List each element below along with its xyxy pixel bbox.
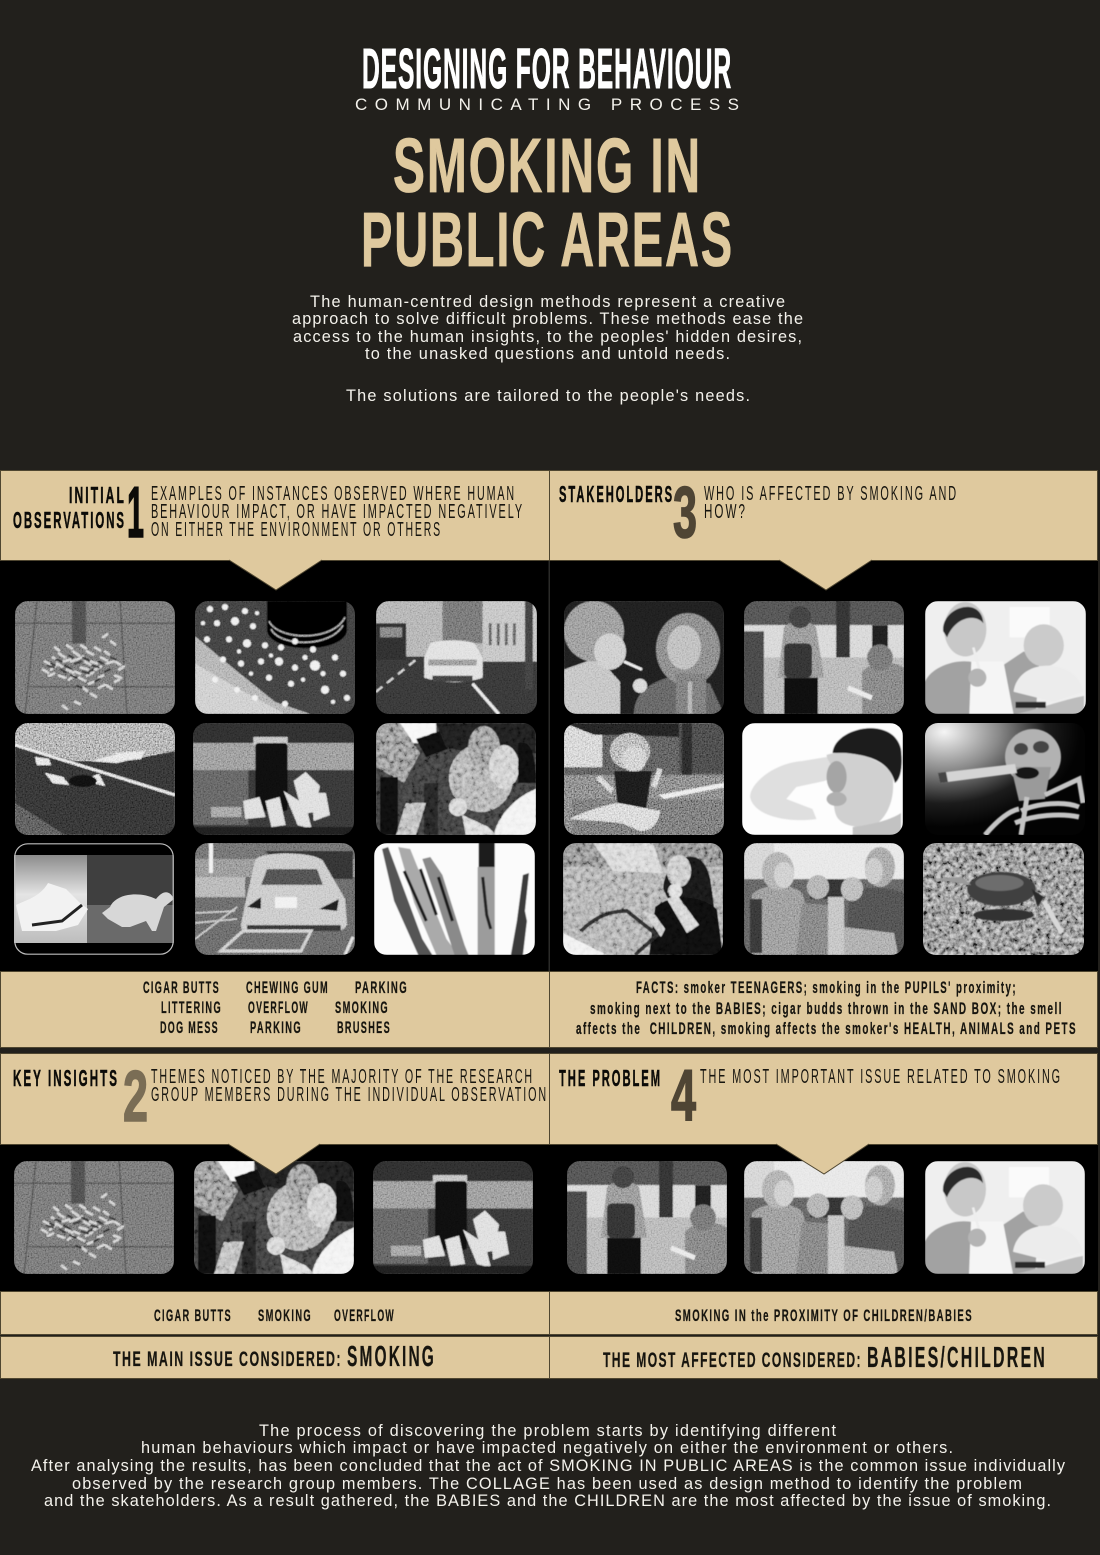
- intro paragraph: The human-centred design methods represent a creative: [310, 293, 785, 311]
- topic heading: PUBLIC AREAS: [361, 197, 734, 283]
- topic heading: SMOKING IN: [393, 123, 702, 209]
- intro paragraph: access to the human insights, to the peoples' hidden desires,: [293, 328, 802, 346]
- photo: mother and baby: [925, 601, 1086, 714]
- number 4: 4: [671, 1056, 696, 1136]
- photo: mother and baby: [925, 1161, 1085, 1274]
- panel: stakeholders header: [550, 470, 1098, 560]
- panel: main issue conclusion: THE MAIN ISSUE CONSIDERED:: [113, 1348, 342, 1371]
- arrow: observations pointer: [229, 560, 322, 590]
- closing paragraph: human behaviours which impact or have impacted negatively on either the environment or others.: [141, 1439, 953, 1457]
- panel: the problem header: THE PROBLEM: [559, 1065, 662, 1091]
- panel: the problem header: [550, 1054, 1098, 1144]
- panel: observations caption: CHEWING GUM: [246, 978, 329, 997]
- photo: smoking teenagers: [564, 601, 724, 714]
- photo: parking on street: [376, 601, 537, 714]
- panel: problem caption: [550, 1292, 1098, 1334]
- photo: smoking man: [376, 723, 536, 835]
- heading: KEY INSIGHTS: [13, 1065, 119, 1091]
- description: GROUP MEMBERS DURING THE INDIVIDUAL OBSERVATION: [151, 1084, 548, 1106]
- photo: brushes: [374, 843, 535, 955]
- intro paragraph: The solutions are tailored to the people's needs.: [346, 387, 750, 405]
- panel: key insights caption: SMOKING: [258, 1306, 312, 1325]
- description: EXAMPLES OF INSTANCES OBSERVED WHERE HUMAN: [151, 483, 516, 505]
- arrow: key insights pointer: [228, 1144, 320, 1174]
- number 3: 3: [673, 473, 697, 553]
- panel: initial observations header: 1: [127, 473, 144, 553]
- panel: main issue conclusion: SMOKING: [347, 1341, 436, 1373]
- panel: observations caption: LITTERING: [161, 998, 222, 1017]
- panel: key insights caption: [0, 1292, 550, 1334]
- panel: stakeholders header: STAKEHOLDERS: [559, 481, 674, 507]
- photo: family with bottles: [744, 1161, 904, 1274]
- closing paragraph: and the skateholders. As a result gathered, the BABIES and the CHILDREN are the most affected by the issue of smoking.: [44, 1492, 1051, 1510]
- photo: dog mess: [14, 843, 174, 955]
- photo: smoking man: [194, 1161, 354, 1274]
- panel: observations caption: SMOKING: [335, 998, 389, 1017]
- photo grid: observations: [14, 601, 537, 955]
- title block: [355, 37, 739, 283]
- description: [704, 483, 958, 523]
- photo row: key insights: [14, 1161, 533, 1274]
- subtitle: COMMUNICATING PROCESS: [355, 95, 739, 114]
- panel: black photo backgrounds: [0, 561, 1098, 1292]
- photo: child holding nose: [742, 723, 903, 835]
- intro paragraph: [292, 293, 803, 405]
- description: [151, 483, 524, 541]
- photo: overflowing bin: [193, 723, 354, 835]
- closing paragraph: After analysing the results, has been concluded that the act of SMOKING IN PUBLIC AREAS is the common issue individually: [31, 1457, 1066, 1475]
- photo: smoking skeleton: [925, 723, 1085, 835]
- panel: key insights header: [0, 1054, 550, 1144]
- heading: INITIAL: [69, 482, 126, 508]
- panel: main issue conclusion: [0, 1336, 550, 1378]
- closing paragraph: observed by the research group members. The COLLAGE has been used as design method to identify the problem: [72, 1475, 1022, 1493]
- panel: observations caption: PARKING: [355, 978, 408, 997]
- closing paragraph: The process of discovering the problem starts by identifying different: [259, 1422, 836, 1440]
- intro paragraph: to the unasked questions and untold needs.: [365, 345, 730, 363]
- panel: stakeholders caption: [550, 972, 1098, 1048]
- photo: littering: [15, 723, 175, 835]
- panel: key insights caption: CIGAR BUTTS: [154, 1306, 232, 1325]
- arrow: stakeholders pointer: [779, 560, 872, 590]
- heading: [13, 482, 126, 533]
- photo: street pupils: [744, 601, 904, 714]
- panel: observations caption: PARKING: [250, 1018, 302, 1037]
- panel: initial observations header: OBSERVATIONS: [13, 507, 126, 533]
- photo: family with bottles: [744, 843, 904, 955]
- panel: observations caption: OVERFLOW: [248, 998, 309, 1017]
- photo: disabled parking: [195, 843, 355, 955]
- panel: key insights caption: OVERFLOW: [334, 1306, 395, 1325]
- panel: observations caption: DOG MESS: [160, 1018, 219, 1037]
- photo grid: stakeholders: [563, 601, 1086, 955]
- panel: most affected conclusion: [550, 1336, 1098, 1378]
- photo: street pupils: [567, 1161, 727, 1274]
- photo: cigar butts: [14, 1161, 174, 1274]
- panel: observations caption: BRUSHES: [337, 1018, 391, 1037]
- description: THEMES NOTICED BY THE MAJORITY OF THE RESEARCH: [151, 1066, 534, 1088]
- description: ON EITHER THE ENVIRONMENT OR OTHERS: [151, 519, 442, 541]
- panel: observations caption: CIGAR BUTTS: [143, 978, 220, 997]
- description: [151, 1066, 548, 1106]
- description: HOW?: [704, 501, 747, 523]
- panel: observations caption: [0, 972, 550, 1048]
- photo: child in sandbox: [564, 723, 732, 835]
- photo row: the problem: [567, 1161, 1085, 1274]
- photo: mother with pram: [563, 843, 723, 955]
- closing paragraph: [31, 1422, 1066, 1510]
- photo: cigar butts: [15, 601, 175, 714]
- panel: initial observations header: [0, 470, 550, 560]
- intro paragraph: approach to solve difficult problems. These methods ease the: [292, 310, 803, 328]
- topic heading: [361, 123, 734, 283]
- photo: bird with cigarette: [923, 843, 1084, 955]
- arrow: problem pointer: [776, 1144, 869, 1174]
- photo: chewing gum: [195, 601, 355, 714]
- number 2: 2: [123, 1057, 148, 1137]
- panel: most affected conclusion: THE MOST AFFECTED CONSIDERED:: [603, 1349, 862, 1372]
- description: BEHAVIOUR IMPACT, OR HAVE IMPACTED NEGATIVELY: [151, 501, 524, 523]
- photo: overflowing bin: [373, 1161, 533, 1274]
